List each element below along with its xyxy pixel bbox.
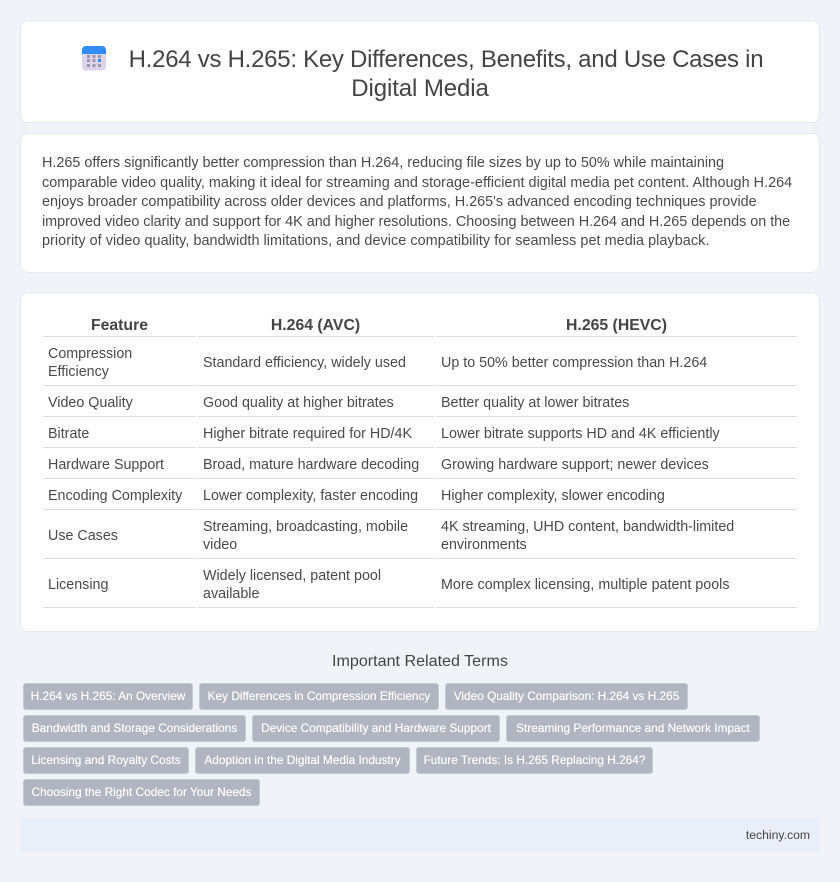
related terms heading: Important Related Terms bbox=[332, 652, 508, 670]
row: Use Cases bbox=[48, 519, 734, 553]
row: Compression Efficiency: Up to 50% better compression than H.264 bbox=[441, 355, 707, 371]
row: Licensing bbox=[48, 568, 729, 602]
row: Bitrate: Bitrate bbox=[48, 426, 89, 442]
tag: Licensing and Royalty Costs bbox=[31, 753, 181, 767]
tag bbox=[23, 747, 189, 774]
row: Use Cases: Streaming, broadcasting, mobile bbox=[203, 519, 408, 535]
title: H.264 vs H.265: Key Differences, Benefits, and Use Cases in bbox=[129, 46, 763, 73]
tag: Video Quality Comparison: H.264 vs H.265 bbox=[454, 689, 679, 703]
row: Bitrate: Higher bitrate required for HD/4K bbox=[203, 426, 412, 442]
tag: Key Differences in Compression Efficiency bbox=[208, 689, 430, 703]
footer site name: techiny.com bbox=[746, 828, 810, 842]
row: Compression Efficiency: Compression bbox=[48, 346, 132, 362]
row: Licensing: available bbox=[203, 586, 259, 602]
row: Video Quality bbox=[48, 395, 629, 411]
tag bbox=[199, 683, 439, 710]
tag bbox=[23, 683, 193, 710]
tag: Streaming Performance and Network Impact bbox=[516, 721, 750, 735]
tag: Device Compatibility and Hardware Support bbox=[261, 721, 491, 735]
table header: H.264 (AVC): H.264 (AVC) bbox=[271, 317, 360, 334]
tag: Adoption in the Digital Media Industry bbox=[204, 753, 401, 767]
tag bbox=[416, 747, 653, 774]
row: Bitrate bbox=[48, 426, 720, 442]
tag: Future Trends: Is H.265 Replacing H.264? bbox=[424, 753, 645, 767]
intro paragraph: H.265 offers significantly better compression than H.264, reducing file sizes by up to 50% while maintaining bbox=[42, 155, 724, 171]
panel: comparison table bbox=[20, 292, 820, 632]
row: Licensing: Licensing bbox=[48, 577, 108, 593]
row: Licensing: More complex licensing, multiple patent pools bbox=[441, 577, 729, 593]
row: Hardware Support: Hardware Support bbox=[48, 457, 164, 473]
row: Use Cases: Use Cases bbox=[48, 528, 118, 544]
tag bbox=[506, 715, 760, 742]
title: Digital Media bbox=[351, 75, 489, 102]
row: Encoding Complexity bbox=[48, 488, 665, 504]
row: Hardware Support: Growing hardware support; newer devices bbox=[441, 457, 709, 473]
tag bbox=[23, 715, 246, 742]
tag bbox=[252, 715, 500, 742]
row: Compression Efficiency: Standard efficiency, widely used bbox=[203, 355, 406, 371]
intro paragraph: enjoys broader compatibility across older devices and platforms, H.265's advanced encoding techniques provide bbox=[42, 194, 757, 210]
panel: intro text bbox=[20, 133, 820, 273]
icon: calendar bbox=[82, 46, 106, 70]
tag list: related terms bbox=[23, 683, 760, 806]
title bbox=[129, 46, 763, 102]
row: Encoding Complexity: Encoding Complexity bbox=[48, 488, 182, 504]
intro paragraph: comparable video quality, making it ideal for streaming and storage-efficient digital media pet content. Although H.264 bbox=[42, 175, 792, 191]
row: Encoding Complexity: Higher complexity, slower encoding bbox=[441, 488, 665, 504]
row: Video Quality: Good quality at higher bitrates bbox=[203, 395, 394, 411]
row: Video Quality: Video Quality bbox=[48, 395, 133, 411]
intro paragraph bbox=[42, 155, 792, 249]
intro paragraph: priority of video quality, bandwidth limitations, and device compatibility for seamless pet media playback. bbox=[42, 233, 709, 249]
tag: Choosing the Right Codec for Your Needs bbox=[32, 785, 251, 799]
intro paragraph: improved video clarity and support for 4K and higher resolutions. Choosing between H.264 and H.265 depends on the bbox=[42, 214, 790, 230]
table header: H.265 (HEVC): H.265 (HEVC) bbox=[566, 317, 667, 334]
row: Use Cases: video bbox=[203, 537, 237, 553]
row: Licensing: Widely licensed, patent pool bbox=[203, 568, 381, 584]
table header: Feature: Feature bbox=[91, 317, 148, 334]
row: Hardware Support bbox=[48, 457, 709, 473]
tag bbox=[23, 779, 260, 806]
row: Compression Efficiency bbox=[48, 346, 707, 380]
row: Video Quality: Better quality at lower bitrates bbox=[441, 395, 629, 411]
tag bbox=[445, 683, 688, 710]
row: Hardware Support: Broad, mature hardware decoding bbox=[203, 457, 419, 473]
row: Bitrate: Lower bitrate supports HD and 4K efficiently bbox=[441, 426, 720, 442]
row: Use Cases: environments bbox=[441, 537, 527, 553]
footer bar bbox=[20, 818, 820, 852]
tag: H.264 vs H.265: An Overview bbox=[31, 689, 185, 703]
tag: Bandwidth and Storage Considerations bbox=[32, 721, 237, 735]
panel: header bbox=[20, 20, 820, 123]
row: Encoding Complexity: Lower complexity, faster encoding bbox=[203, 488, 418, 504]
row: Use Cases: 4K streaming, UHD content, bandwidth-limited bbox=[441, 519, 734, 535]
row: Compression Efficiency: Efficiency bbox=[48, 364, 109, 380]
tag bbox=[195, 747, 410, 774]
